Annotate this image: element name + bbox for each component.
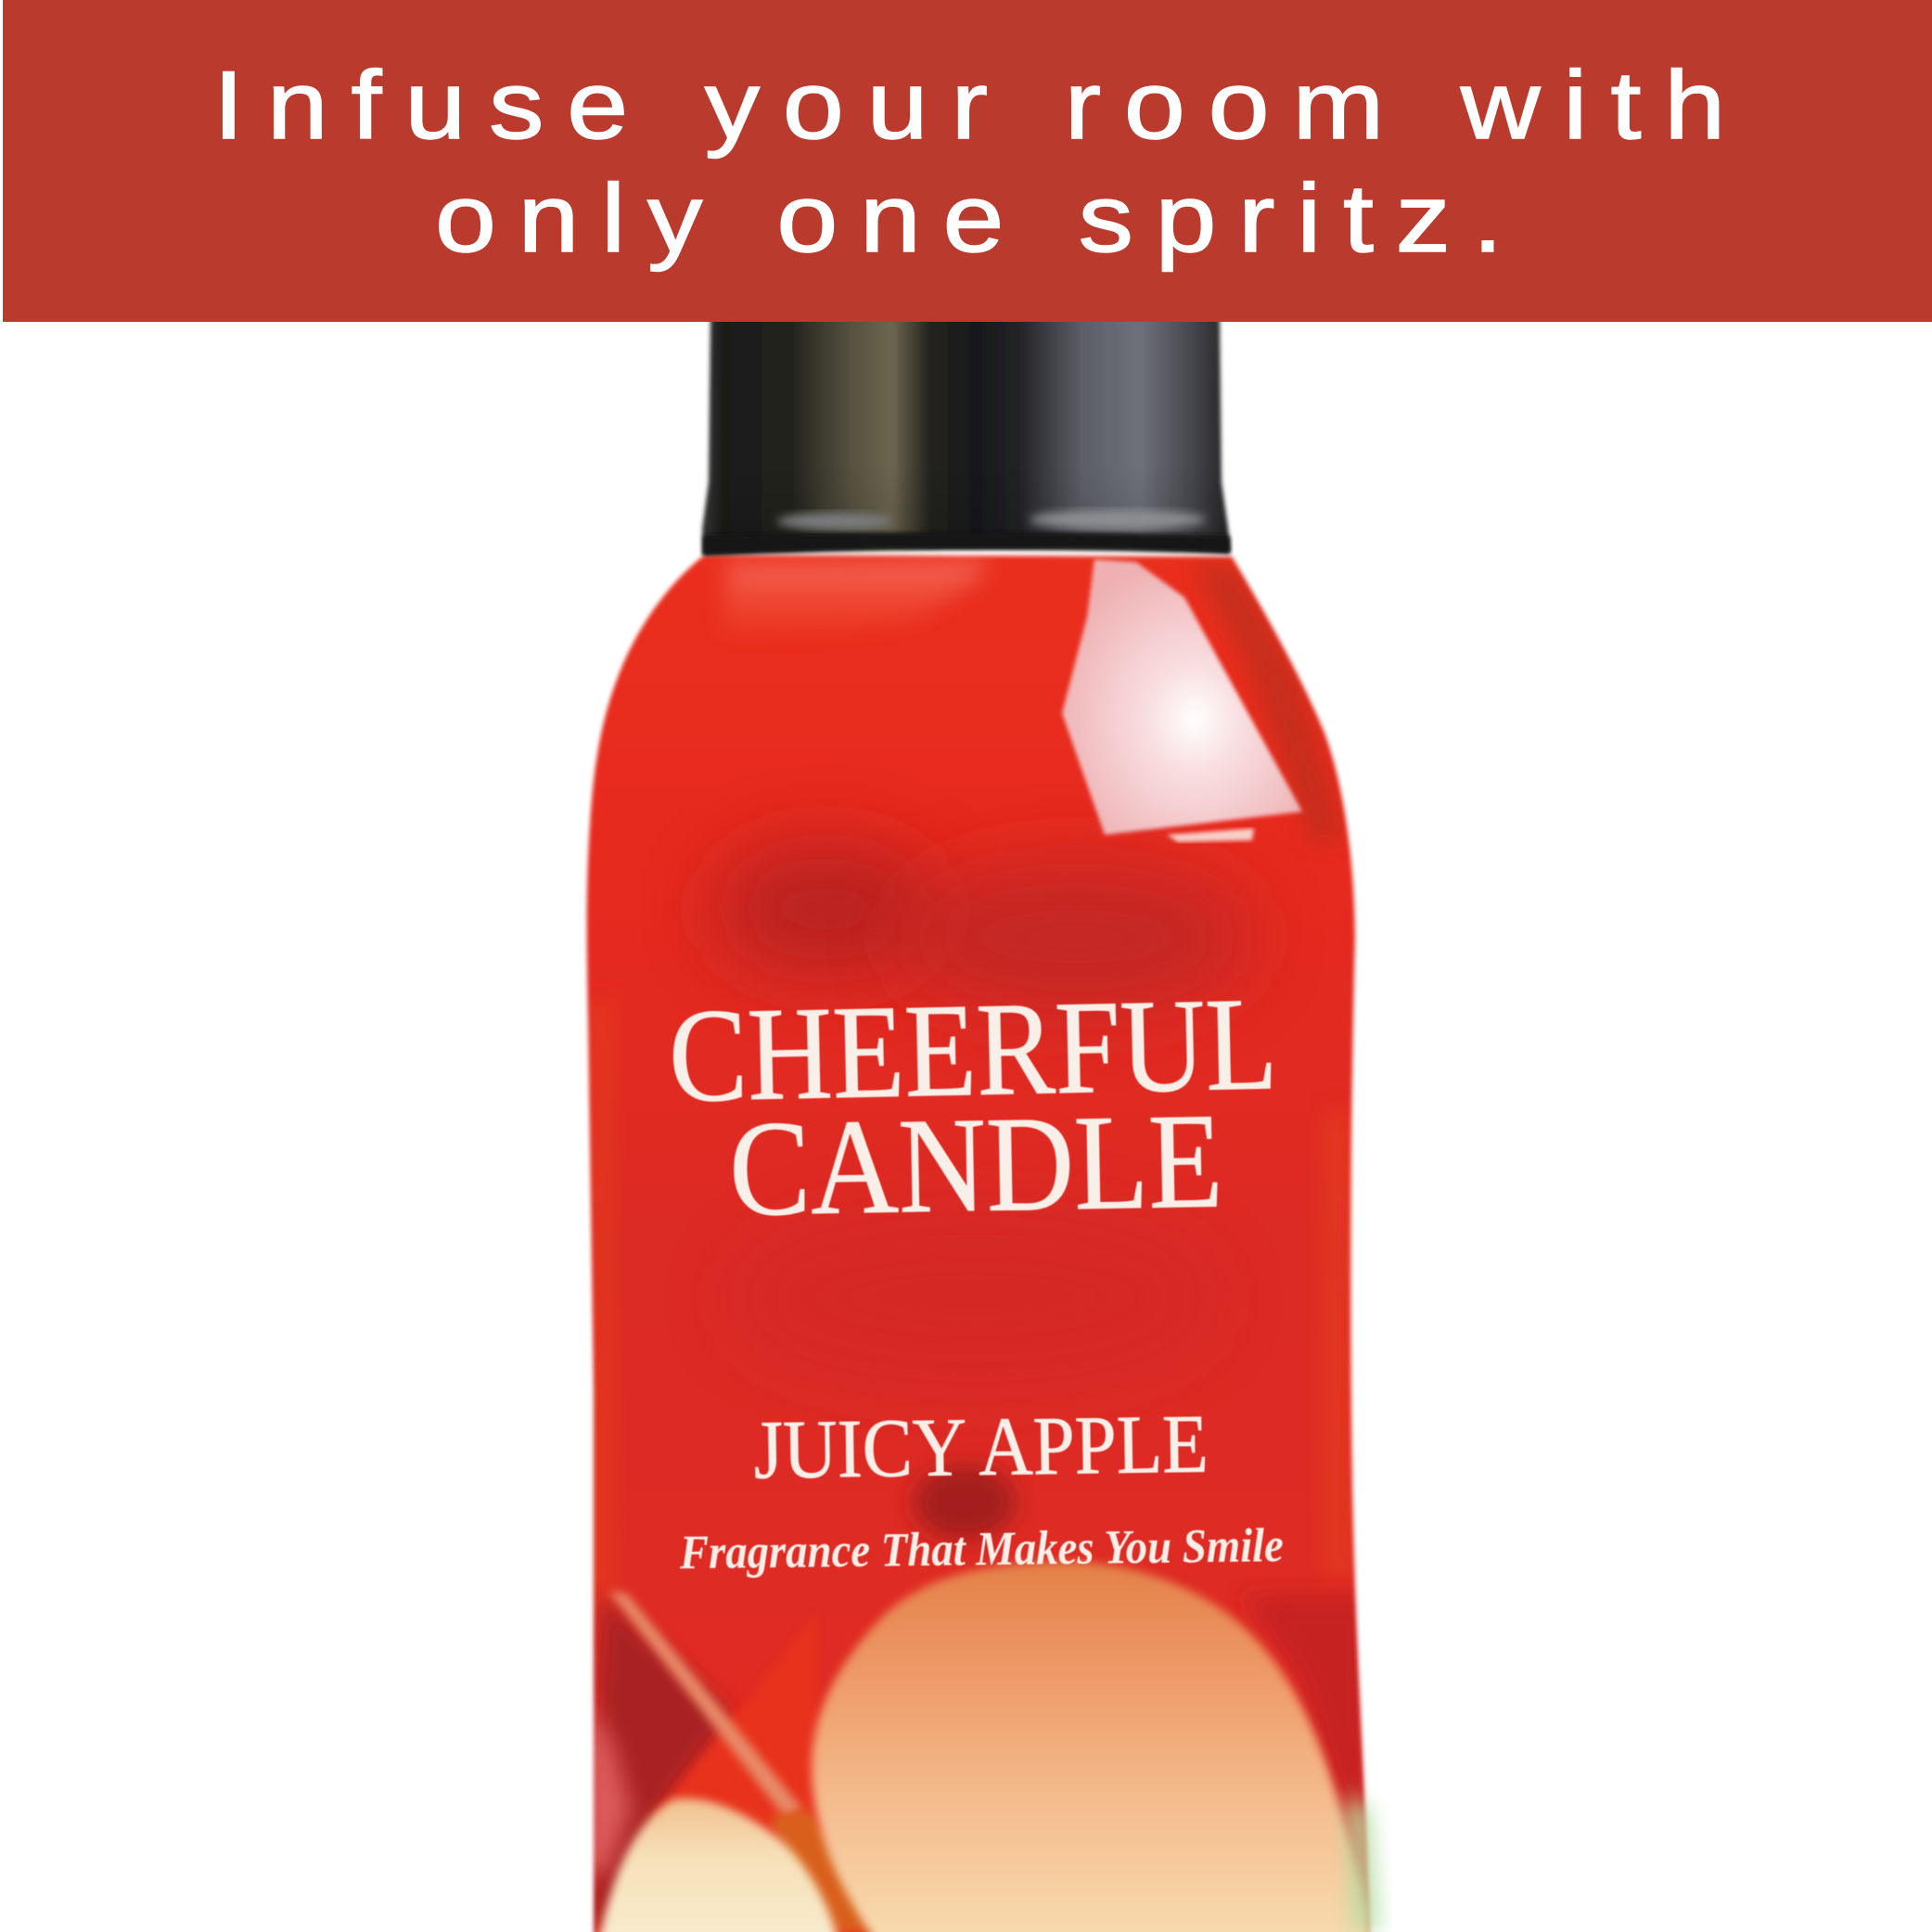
green leaf beyond edge xyxy=(1345,1795,1378,1932)
apple artwork xyxy=(584,1562,1373,1932)
bottle body xyxy=(557,547,1391,1932)
bottle xyxy=(557,315,1391,1932)
tagline on label: Fragrance That Makes You Smile xyxy=(679,1519,1284,1580)
right glare highlight xyxy=(1062,559,1302,842)
heading text: Infuse your room with xyxy=(213,51,1725,159)
dark apple skin xyxy=(584,1595,733,1932)
brand name: CANDLE xyxy=(728,1084,1224,1245)
brand name xyxy=(668,970,1279,1245)
large apple slice xyxy=(812,1562,1373,1932)
scent name: JUICY APPLE xyxy=(753,1399,1209,1496)
red apple skin xyxy=(657,1631,812,1820)
heading text: only one spritz. xyxy=(435,164,1503,272)
brand name: CHEERFUL xyxy=(668,970,1279,1131)
bottle cap xyxy=(702,315,1230,555)
dark shading on label xyxy=(586,561,1353,1605)
left shoulder highlight xyxy=(722,560,988,638)
orange core between slices xyxy=(768,1805,872,1932)
small apple slice xyxy=(598,1798,839,1932)
apple stem streak xyxy=(608,1591,802,1820)
heading banner xyxy=(3,0,1932,322)
heading text xyxy=(213,51,1725,272)
